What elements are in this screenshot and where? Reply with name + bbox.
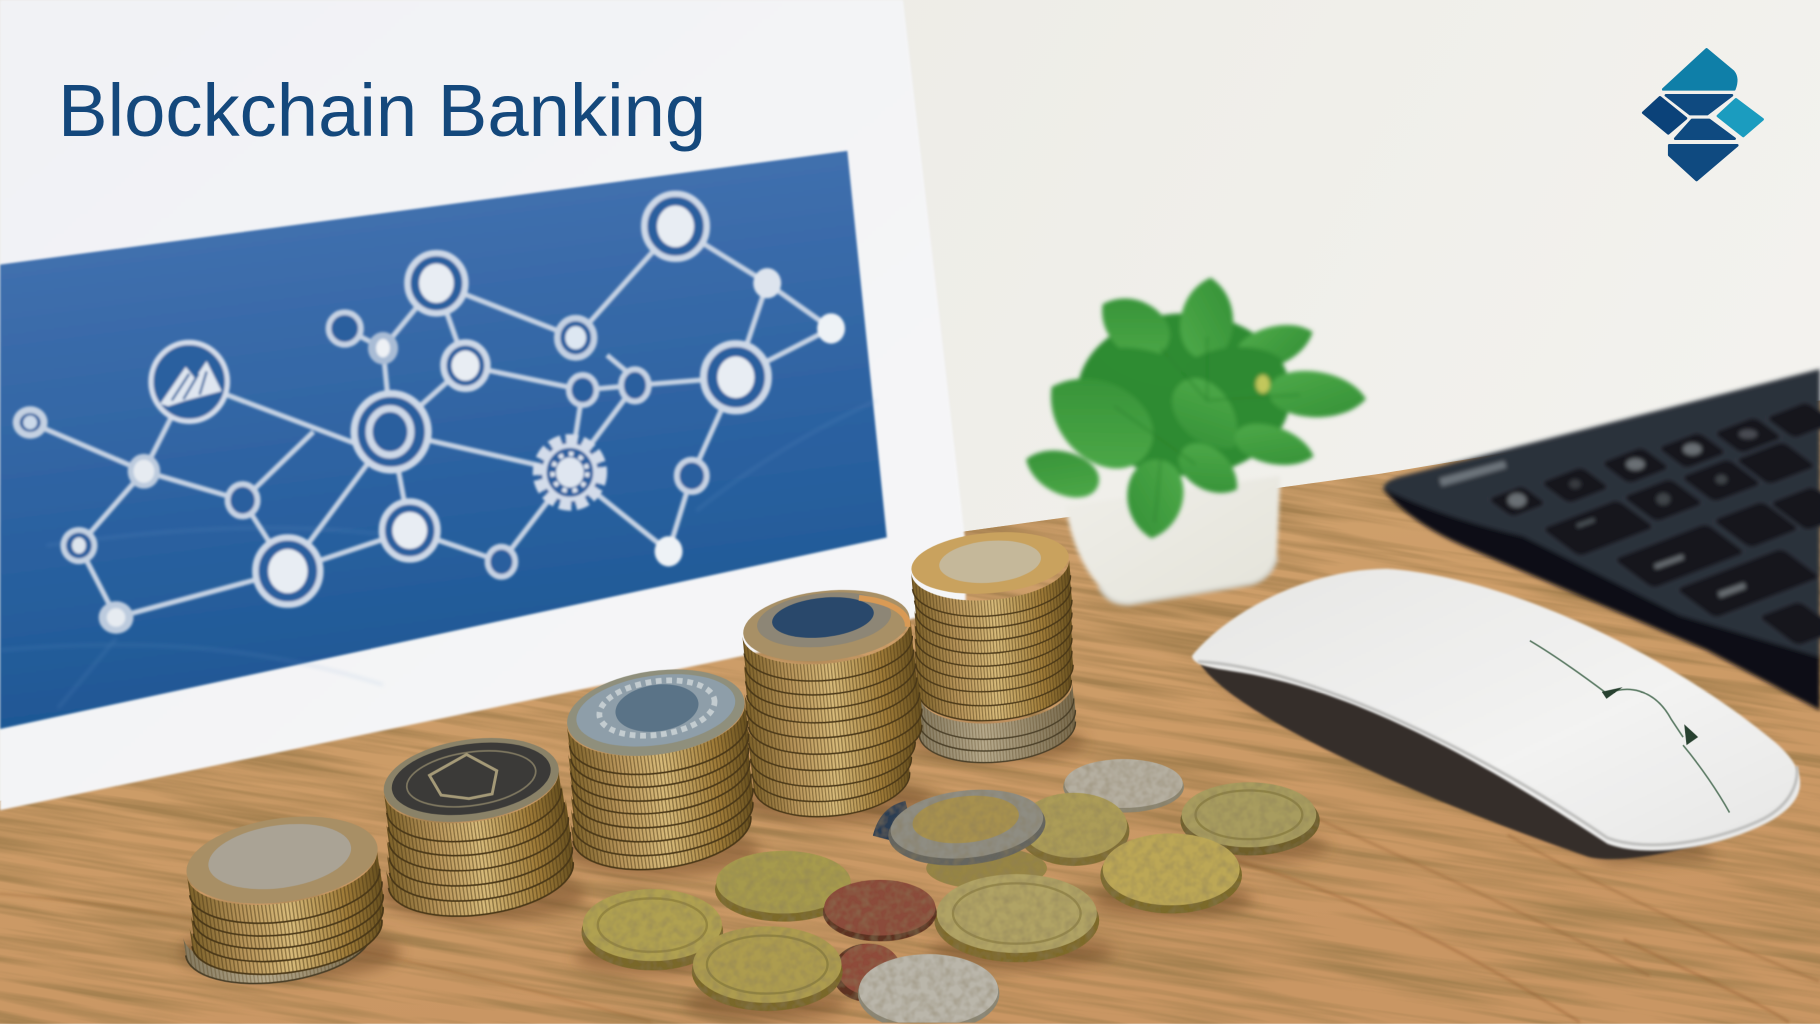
large white nodes — [255, 194, 768, 605]
keyboard body — [1384, 369, 1820, 710]
keyboard — [1384, 369, 1820, 710]
gear node — [539, 440, 601, 505]
gold coin upper — [715, 851, 852, 922]
copper coin — [823, 880, 937, 941]
olive gold coin — [1180, 782, 1320, 855]
coin shadows — [180, 725, 1329, 1020]
panel light streaks — [0, 400, 876, 708]
title: Blockchain Banking — [58, 69, 706, 152]
gold coin left — [582, 889, 723, 970]
plant leaves — [1019, 275, 1368, 541]
key legends — [1508, 429, 1757, 598]
mouse shadow — [1213, 685, 1718, 865]
gold coin bottom — [692, 926, 843, 1011]
loose coins — [582, 759, 1320, 1023]
central double ring node — [354, 393, 428, 470]
coin stack 5 — [909, 526, 1078, 769]
computer mouse — [1192, 569, 1800, 865]
hollow ring nodes — [228, 312, 707, 577]
gold coin right — [1100, 833, 1242, 913]
coin stack 2 — [378, 728, 579, 927]
coin stack 3 — [561, 659, 758, 880]
gold coin centre — [934, 874, 1099, 962]
small filled nodes — [13, 268, 845, 634]
keyboard keys — [1486, 401, 1820, 647]
silver coin bottom — [858, 954, 999, 1023]
blockchain network diagram — [13, 194, 845, 634]
coin stack 1 — [181, 805, 388, 994]
logo — [1643, 49, 1763, 180]
mountain logo node — [151, 342, 228, 421]
network connecting lines — [30, 226, 831, 618]
mouse edge highlight — [1198, 662, 1797, 845]
bimetal coin — [873, 783, 1049, 873]
mouse underside — [1200, 664, 1741, 859]
white display board — [0, 0, 966, 810]
mouse centre seam — [1530, 641, 1729, 813]
rear gold coins — [926, 793, 1129, 889]
wooden desk — [0, 400, 1820, 1024]
copper coin small — [832, 944, 902, 1002]
plant pot — [1066, 476, 1280, 604]
coin stack 4 — [740, 582, 925, 824]
blue panel — [0, 151, 887, 729]
mouse top shell — [1192, 569, 1800, 851]
silver coin — [1063, 759, 1184, 813]
